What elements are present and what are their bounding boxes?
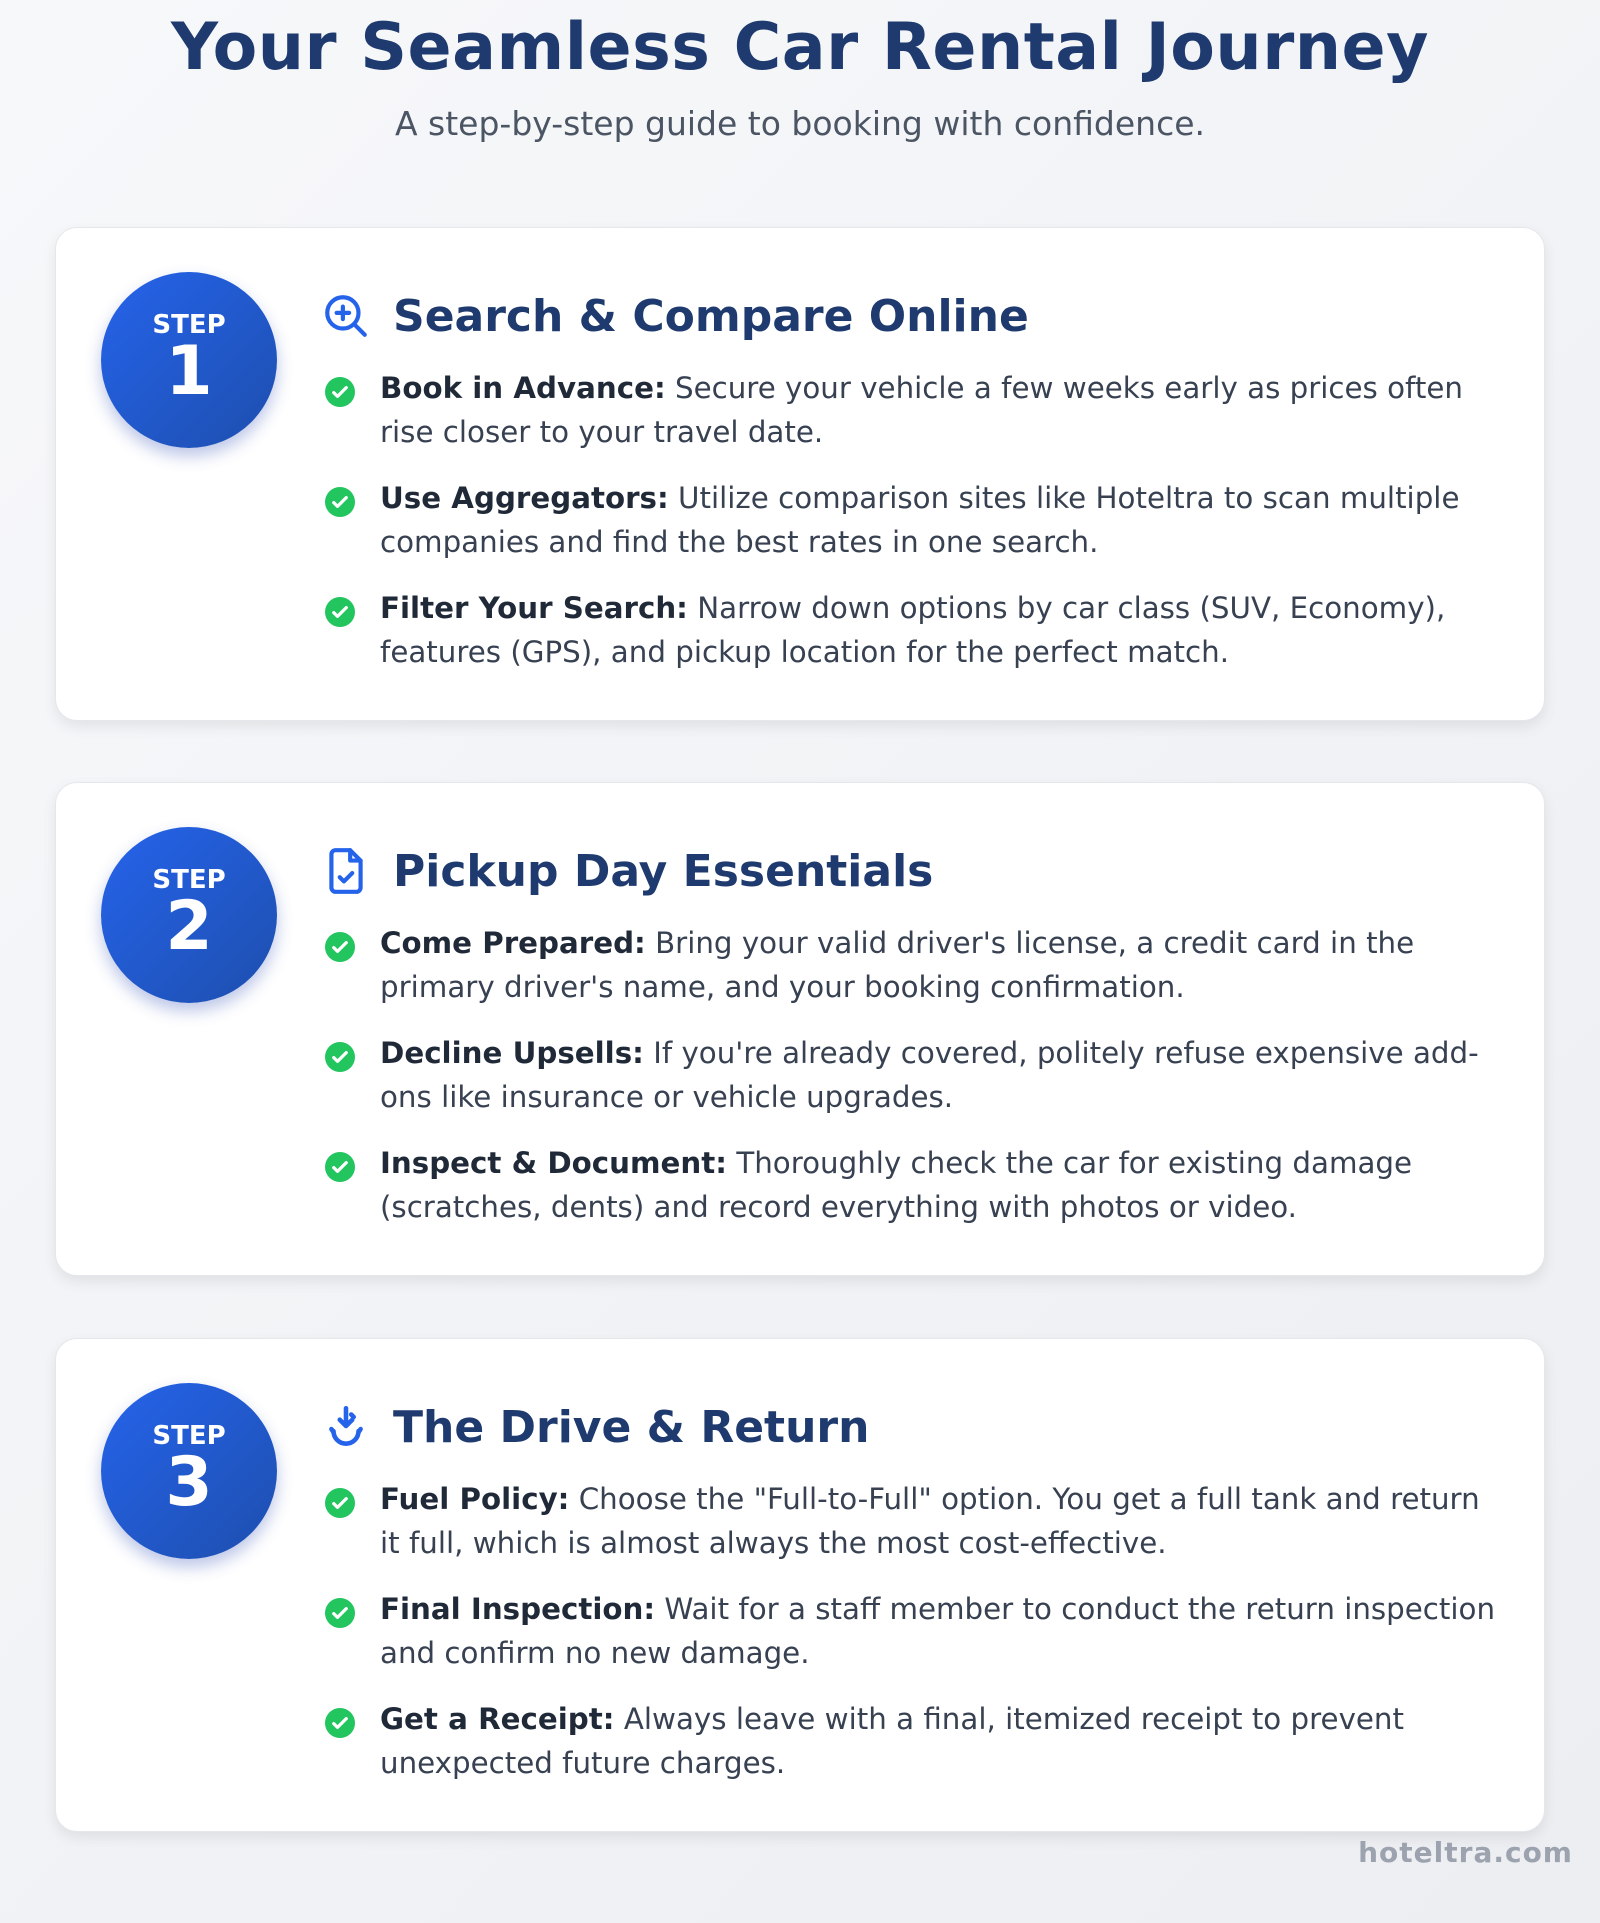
bullet list: Decline Upsells: If you're already covered, politely refuse expensive add-ons like insurance or vehicle upgrades.: [380, 1036, 1479, 1114]
step badge 1: STEP: [152, 310, 226, 340]
footer brand: hoteltra.com: [1358, 1836, 1573, 1869]
heading: search & compare: Search & Compare Online: [393, 290, 1029, 342]
bullet list: Filter Your Search: Narrow down options by car class (SUV, Economy), features (GPS), and pickup location for the perfect match.: [380, 591, 1445, 669]
bullet list: [325, 926, 1479, 1224]
bullet list: Final Inspection: Wait for a staff member to conduct the return inspection and confirm no new damage.: [380, 1592, 1495, 1670]
bullet list: Get a Receipt: Always leave with a final, itemized receipt to prevent unexpected future charges.: [380, 1702, 1404, 1780]
bullet list: [325, 1482, 1495, 1780]
subtitle: A step-by-step guide to booking with confidence.: [395, 104, 1205, 143]
step badge 3: 3: [165, 1443, 213, 1522]
panel: step 2: [55, 782, 1545, 1276]
bullet list: Come Prepared: Bring your valid driver's license, a credit card in the primary driver's name, and your booking confirmation.: [380, 926, 1414, 1004]
step badge 2: STEP: [152, 865, 226, 895]
bullet list: Use Aggregators: Utilize comparison sites like Hoteltra to scan multiple companies and find the best rates in one search.: [380, 481, 1459, 559]
step badge 3: [101, 1383, 277, 1559]
step badge 3: STEP: [152, 1421, 226, 1451]
bullet list: Fuel Policy: Choose the "Full-to-Full" option. You get a full tank and return it full, which is almost always the most cost-effective.: [380, 1482, 1480, 1560]
bullet list: Book in Advance: Secure your vehicle a few weeks early as prices often rise closer to your travel date.: [380, 371, 1463, 449]
title: Your Seamless Car Rental Journey: [171, 10, 1429, 85]
step badge 2: [101, 827, 277, 1003]
heading: drive & return: The Drive & Return: [393, 1402, 869, 1452]
heading: pickup day: Pickup Day Essentials: [393, 846, 933, 896]
step badge 2: 2: [165, 887, 213, 966]
bullet list: [325, 371, 1463, 669]
panel: step 1: [55, 227, 1545, 721]
panel: step 3: [55, 1338, 1545, 1832]
step badge 1: [101, 272, 277, 448]
bullet list: Inspect & Document: Thoroughly check the car for existing damage (scratches, dents) and record everything with photos or video.: [380, 1146, 1412, 1224]
step badge 1: 1: [165, 332, 213, 411]
